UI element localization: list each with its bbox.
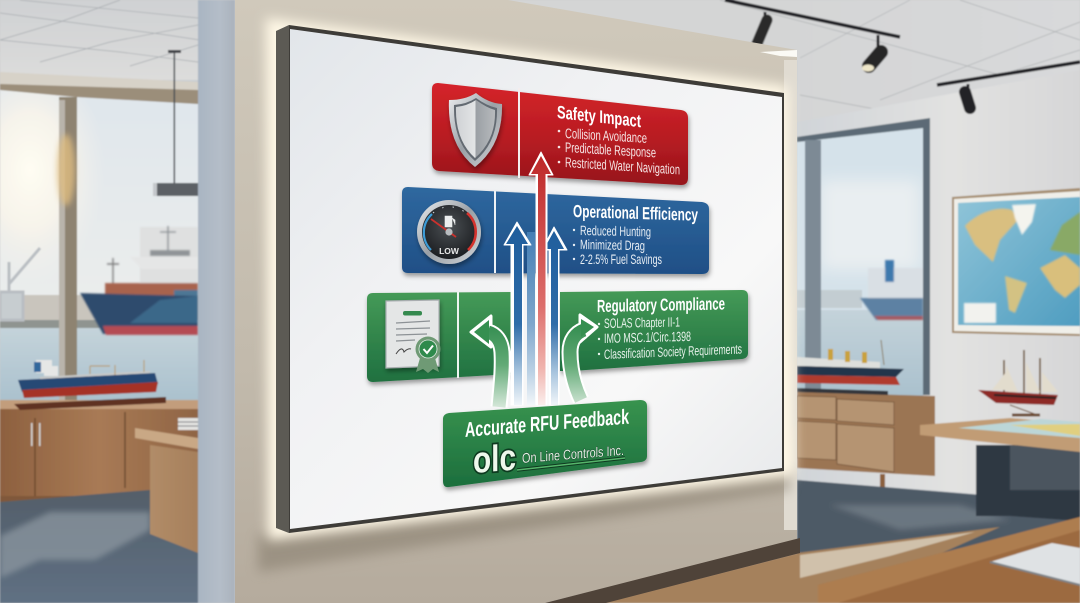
list: efficiency items: Minimized Drag — [580, 237, 645, 253]
red card background — [432, 83, 688, 185]
wall shadow below panel — [258, 468, 790, 572]
list: safety items: Predictable Response — [565, 139, 656, 160]
left desk — [135, 418, 198, 449]
model ship: liner — [797, 340, 904, 395]
list: safety items — [558, 125, 680, 177]
crane — [0, 248, 40, 320]
icon: certificate with rosette — [386, 300, 440, 373]
left cabinet — [0, 400, 198, 502]
pillar — [198, 0, 235, 603]
right window with ship — [797, 120, 927, 398]
pendant light — [153, 50, 198, 196]
left window with harbour view — [0, 90, 199, 401]
icon: low fuel gauge — [417, 200, 481, 264]
right window frame — [797, 118, 930, 395]
blue card background — [402, 187, 709, 274]
heading: accurate rfu feedback: Accurate RFU Feedback — [465, 406, 629, 442]
green card right section — [560, 290, 748, 371]
list: regulatory items: SOLAS Chapter II-1 — [604, 314, 680, 331]
foreground desk with papers — [818, 517, 1080, 603]
logo: on line controls — [473, 436, 625, 481]
icon: shield — [449, 93, 502, 167]
window frame and soffit — [0, 72, 198, 402]
left ceiling — [0, 0, 200, 80]
list: efficiency items: Reduced Hunting — [580, 223, 651, 239]
right sideboard — [797, 392, 935, 495]
right carpet floor and wood floor — [600, 480, 1080, 603]
container ship — [80, 226, 198, 335]
green card left section — [367, 292, 512, 382]
list: efficiency items — [573, 223, 662, 267]
card: safety impact — [432, 83, 688, 185]
sailing ship model — [978, 350, 1058, 416]
list: regulatory items — [598, 314, 742, 362]
card: operational efficiency — [402, 187, 709, 274]
world map — [952, 188, 1080, 336]
arrow: light blue stem — [527, 232, 535, 405]
logo wordmark: On Line Controls Inc. — [522, 442, 624, 466]
arrow: blue to operational efficiency (left) — [504, 222, 531, 405]
list: efficiency items: 2-2.5% Fuel Savings — [580, 252, 662, 267]
list: safety items: Collision Avoidance — [565, 125, 647, 146]
logo mark: olc — [473, 436, 516, 481]
skirting board — [545, 538, 800, 603]
gauge label: LOW — [439, 246, 460, 256]
left desk body — [150, 445, 198, 553]
list: safety items: Restricted Water Navigation — [565, 154, 680, 177]
card: regulatory compliance — [367, 290, 748, 382]
feature wall — [235, 0, 797, 603]
arrow: left green branch to regulatory compliance — [471, 316, 502, 407]
backlight glow — [266, 18, 794, 540]
green base card background — [443, 400, 647, 487]
list: regulatory items: Classification Society Requirements — [604, 341, 742, 362]
carpet floor left — [0, 490, 198, 603]
heading: operational efficiency: Operational Efficiency — [573, 201, 698, 225]
right table — [920, 418, 1080, 521]
display panel — [276, 25, 784, 533]
track lights — [725, 0, 1080, 108]
model ship: tanker — [14, 360, 166, 410]
right ceiling — [500, 0, 1080, 130]
card: accurate rfu feedback — [443, 400, 647, 487]
right wall — [797, 70, 1080, 503]
arrow: red to safety impact — [529, 152, 553, 405]
arrow: blue to operational efficiency (right) — [542, 227, 567, 405]
list: regulatory items: IMO MSC.1/Circ.1398 — [604, 329, 691, 346]
arrow: right green branch to regulatory compliance — [570, 315, 597, 400]
heading: safety impact: Safety Impact — [557, 102, 641, 131]
heading: regulatory compliance: Regulatory Compliance — [597, 293, 725, 316]
